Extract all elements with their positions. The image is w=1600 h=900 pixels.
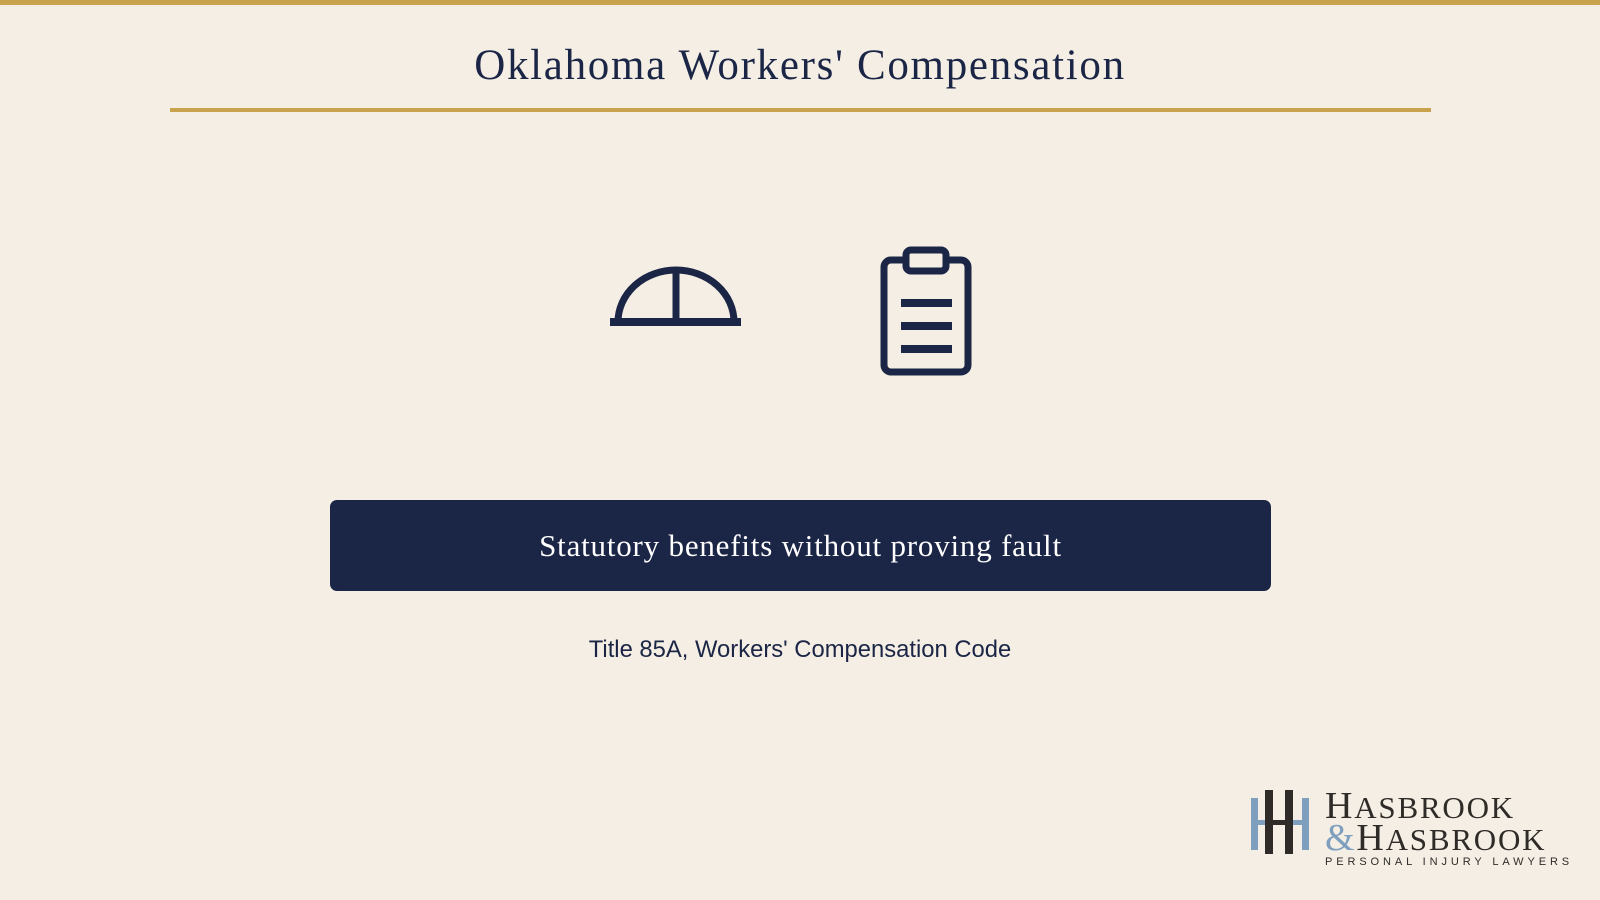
icon: hard hat — [610, 266, 741, 326]
title: Oklahoma Workers' Compensation — [474, 42, 1126, 89]
logo: HASBROOK — [1325, 785, 1515, 827]
logo: PERSONAL INJURY LAWYERS — [1325, 856, 1573, 868]
callout box — [330, 500, 1271, 591]
icon: clipboard — [880, 246, 972, 376]
callout box: Statutory benefits without proving fault — [539, 528, 1062, 563]
logo — [1251, 785, 1573, 868]
subtitle: Title 85A, Workers' Compensation Code — [589, 636, 1011, 663]
logo: &HASBROOK — [1325, 817, 1546, 859]
